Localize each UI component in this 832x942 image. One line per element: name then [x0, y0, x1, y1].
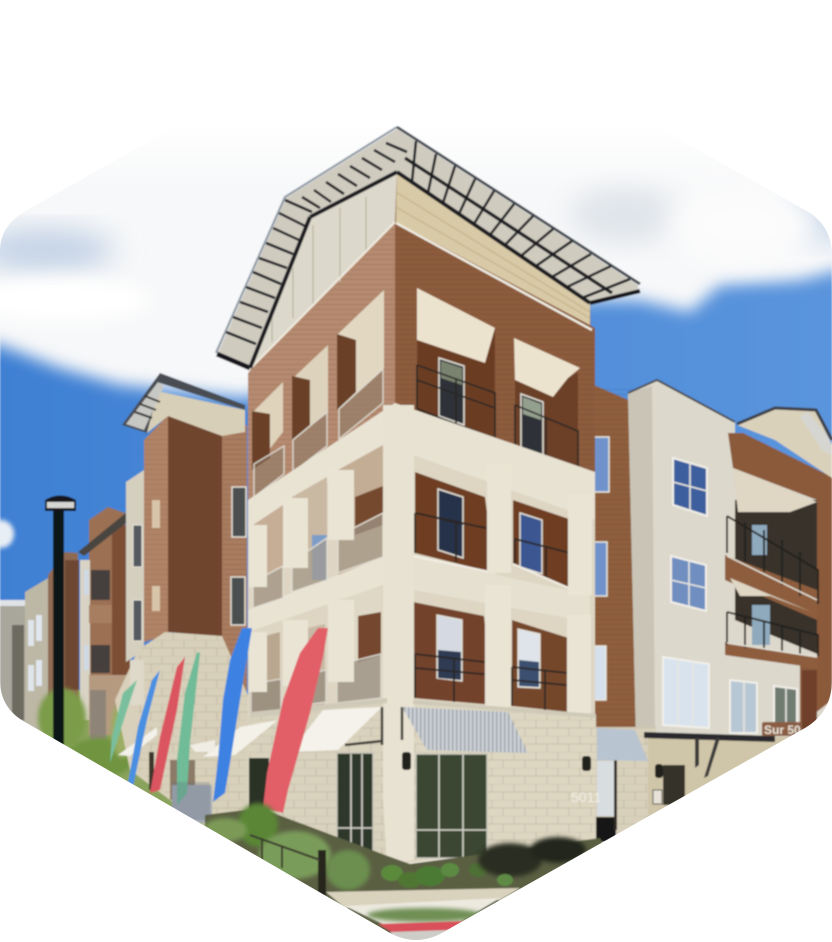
left face railings: [254, 369, 383, 497]
small green flag: [110, 680, 137, 763]
main tower: right face upper: [415, 287, 596, 472]
blue flag: [213, 628, 252, 802]
far right balconies: [725, 408, 832, 730]
right brown wing: [594, 384, 636, 728]
far right balcony backing: [734, 469, 828, 738]
small red flag: [150, 657, 185, 793]
lower floor, right face: [413, 602, 578, 713]
curb and walkway: [326, 888, 520, 942]
right ground floor: [596, 722, 802, 852]
cream concrete frame: upper beams and columns: [248, 403, 595, 632]
left face mid and lower openings: [250, 445, 383, 718]
cream right block: [628, 380, 797, 740]
ground floor brick base: [250, 712, 598, 860]
awnings: [190, 707, 528, 757]
ground floor windows: [249, 753, 487, 858]
gable walls: [249, 173, 592, 370]
feather flags: [110, 628, 328, 813]
small blue flag: [128, 670, 160, 787]
roof rafters: [226, 141, 630, 344]
street lamp: [45, 496, 76, 745]
left face openings: [252, 290, 384, 470]
far left buildings: [0, 507, 130, 740]
mailboxes: [172, 782, 210, 820]
cream block windows: [663, 458, 797, 733]
main tower: left face upper: [248, 222, 395, 500]
green flag: [177, 652, 200, 805]
building sign: Sur 50: [764, 723, 801, 737]
left tower block: [115, 373, 250, 830]
roof: [216, 127, 640, 368]
landscaping: [203, 803, 610, 935]
main tower lower backing soffit: [248, 403, 595, 866]
sky with clouds: [0, 126, 832, 696]
wall lamps: [402, 752, 663, 778]
windows in brown wing: [591, 437, 609, 700]
address numerals: 5011: [571, 789, 601, 805]
right awning: [597, 728, 648, 761]
cream columns: [249, 405, 596, 864]
red flag: [263, 628, 328, 813]
mid floor, right face: [413, 472, 578, 592]
main tower backing: [250, 175, 592, 404]
lower-left greenery backing: [0, 690, 220, 840]
trees: [38, 688, 134, 778]
